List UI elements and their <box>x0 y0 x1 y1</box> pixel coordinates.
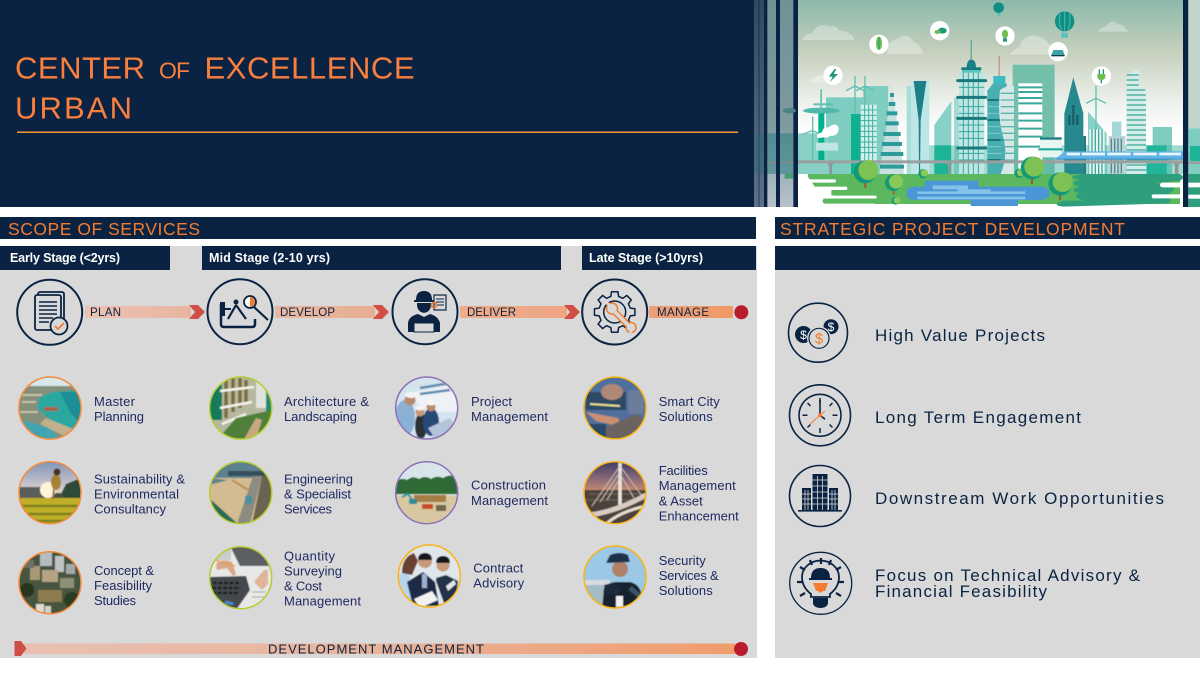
icon: office buildings <box>790 466 850 526</box>
service: construction management: Management <box>471 493 548 508</box>
service: quantity surveying <box>209 546 361 610</box>
wind turbines <box>803 76 1106 160</box>
text: long term engagement: Long Term Engagement <box>875 408 1081 427</box>
title: OF <box>159 58 190 84</box>
service: concept and feasibility <box>19 551 154 614</box>
service: sustainability <box>19 461 185 525</box>
icon: manage gear and wrench <box>582 280 647 344</box>
panel: strategic project development <box>775 217 1200 658</box>
service: smart city: Solutions <box>659 409 713 424</box>
text: downstream work opportunities: Downstream Work Opportunities <box>875 489 1164 508</box>
service: facilities management: Enhancement <box>659 509 739 524</box>
arrow: deliver <box>460 305 580 319</box>
eco icons and balloons <box>823 2 1111 86</box>
window frame strips left <box>750 0 798 207</box>
text: focus on technical advisory: Focus on Technical Advisory & <box>875 566 1141 585</box>
service: construction management <box>395 461 548 526</box>
towers <box>851 40 1146 174</box>
service: engineering: & Specialist <box>284 486 351 502</box>
icon: coins <box>788 303 848 362</box>
service: contract advisory <box>398 545 525 608</box>
arrow: deliver: DELIVER <box>467 307 516 319</box>
service: engineering: Services <box>284 502 332 516</box>
arrow: plan: PLAN <box>90 307 121 319</box>
heading: strategic project development: STRATEGIC PROJECT DEVELOPMENT <box>780 219 1125 239</box>
park ground <box>798 174 1183 207</box>
panel: scope of services <box>0 217 757 658</box>
service: contract advisory: Advisory <box>473 576 525 591</box>
title: EXCELLENCE <box>204 50 414 86</box>
arrow: plan <box>85 305 205 319</box>
icon: lightbulb with helmet <box>790 552 852 614</box>
service: quantity surveying: Management <box>284 594 361 608</box>
stage bar: mid: Mid Stage (2-10 yrs) <box>209 251 330 265</box>
city skyline illustration <box>750 0 1200 207</box>
service: sustainability: Sustainability & <box>94 472 185 486</box>
service: quantity surveying: & Cost <box>284 578 322 594</box>
arrow: manage: MANAGE <box>657 307 709 319</box>
service: contract advisory: Contract <box>473 560 524 575</box>
service: facilities management: & Asset <box>659 494 703 508</box>
stage bar: early: Early Stage (<2yrs) <box>10 251 120 265</box>
service: facilities management <box>584 461 739 526</box>
service: project management <box>395 377 548 440</box>
stage bar: late <box>582 246 756 270</box>
service: architecture and landscaping: Landscaping <box>284 409 357 424</box>
service: engineering <box>209 461 353 525</box>
stage bar: mid <box>202 246 561 270</box>
service: quantity surveying: Surveying <box>284 564 342 579</box>
text: focus on technical advisory <box>875 566 1141 601</box>
service: quantity surveying: Quantity <box>284 549 336 564</box>
window frame right <box>1183 0 1200 207</box>
elevated rail and train <box>798 151 1200 176</box>
header banner <box>0 0 756 207</box>
service: master planning: Master <box>94 394 136 409</box>
clouds <box>802 22 1128 83</box>
icon: deliver engineer <box>392 279 458 344</box>
icon: plan document <box>17 280 82 345</box>
service: facilities management: Management <box>659 478 736 493</box>
service: security: Security <box>659 553 706 568</box>
service: security <box>584 546 719 610</box>
arrow: manage <box>649 305 748 319</box>
heading: scope of services <box>0 217 756 239</box>
heading: scope of services: SCOPE OF SERVICES <box>8 219 200 239</box>
arrow: develop <box>275 305 389 319</box>
service: architecture and landscaping: Architecture & <box>284 394 369 409</box>
arrow: develop: DEVELOP <box>280 307 335 319</box>
title: URBAN <box>15 90 132 126</box>
service: engineering: Engineering <box>284 472 353 486</box>
icon: clock <box>790 385 850 446</box>
arrow: development management <box>14 641 748 656</box>
water tower and cloud <box>803 89 840 160</box>
service: master planning <box>19 377 144 439</box>
service: architecture and landscaping <box>209 377 369 439</box>
arrow: development management: DEVELOPMENT MANAGEMENT <box>268 641 484 656</box>
icon: coins: $ <box>815 330 824 348</box>
trees <box>854 157 1073 205</box>
service: concept and feasibility: Studies <box>94 593 136 608</box>
service: security: Services & <box>659 568 719 583</box>
text: focus on technical advisory: Financial Feasibility <box>875 582 1048 601</box>
title <box>15 50 414 126</box>
service: sustainability: Consultancy <box>94 502 166 516</box>
icon: coins: $ <box>800 328 807 342</box>
title: CENTER <box>15 50 145 86</box>
icon: develop drafting compass <box>208 279 272 344</box>
stage bar: early <box>0 246 170 270</box>
icon: coins: $ <box>828 320 835 334</box>
text: high value projects: High Value Projects <box>875 326 1045 345</box>
service: smart city <box>584 377 720 439</box>
service: master planning: Planning <box>94 409 144 424</box>
service: facilities management: Facilities <box>659 463 708 478</box>
stage bar: late: Late Stage (>10yrs) <box>589 251 703 265</box>
service: construction management: Construction <box>471 478 546 492</box>
service: smart city: Smart City <box>659 394 720 409</box>
navy strip <box>775 246 1200 270</box>
service: sustainability: Environmental <box>94 486 179 502</box>
background buildings <box>798 65 1183 174</box>
service: concept and feasibility: Concept & <box>94 563 154 578</box>
service: project management: Project <box>471 394 512 409</box>
service: project management: Management <box>471 409 548 424</box>
service: security: Solutions <box>659 583 713 598</box>
service: concept and feasibility: Feasibility <box>94 578 152 593</box>
